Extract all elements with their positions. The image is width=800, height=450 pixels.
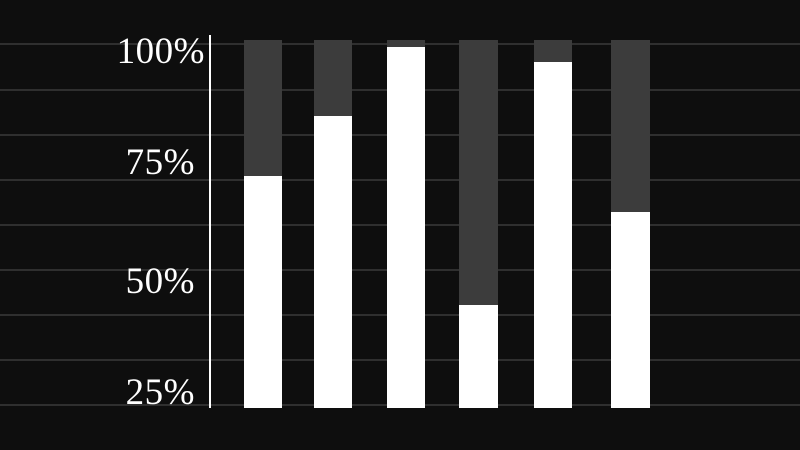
y axis line	[209, 35, 211, 408]
bars	[244, 40, 650, 408]
y axis labels: 100%	[117, 31, 205, 72]
y axis labels: 75%	[126, 142, 195, 183]
y axis labels: 50%	[126, 261, 195, 302]
y axis labels	[117, 31, 205, 413]
y axis labels: 25%	[126, 372, 195, 413]
